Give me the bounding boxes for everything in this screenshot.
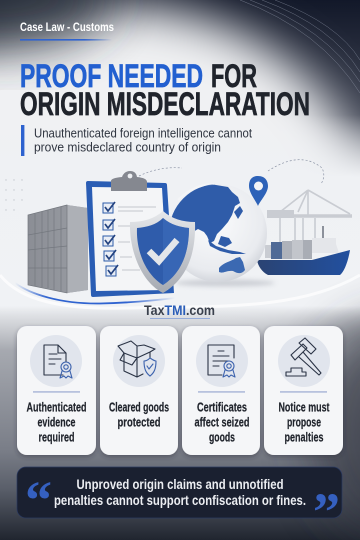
caption: evidence: [38, 416, 76, 430]
title: [20, 58, 310, 122]
caption: affect seized: [194, 416, 250, 430]
caption: required: [38, 430, 74, 444]
caption: [26, 400, 86, 444]
illustration: cargo ship: [257, 226, 350, 275]
subtitle: [21, 125, 252, 156]
checklist: [103, 202, 156, 276]
caption: propose: [287, 416, 321, 430]
eyebrow: Case Law - Customs: Case Law - Customs: [20, 22, 114, 34]
eyebrow: Case Law - Customs: [20, 22, 114, 41]
caption: Cleared goods: [109, 400, 169, 414]
caption: goods: [209, 430, 235, 444]
caption: [109, 400, 169, 430]
panel: certificates: [182, 326, 260, 455]
title: PROOF NEEDED: [20, 58, 203, 94]
callout banner: [17, 467, 342, 540]
caption: penalties: [284, 430, 324, 444]
brand: TaxTMI.com: TaxTMI.com: [144, 303, 215, 318]
illustration: location pin: [249, 176, 268, 206]
caption: protected: [118, 416, 160, 430]
caption: Notice must: [278, 400, 330, 414]
caption: Authenticated: [26, 400, 86, 414]
caption: [278, 400, 330, 444]
illustration: shipping container: [28, 205, 88, 293]
panel: cleared goods: [100, 326, 178, 455]
illustration: shield with check: [130, 211, 195, 293]
subtitle: prove misdeclared country of origin: [34, 140, 221, 154]
title: FOR: [211, 58, 257, 94]
panel: notice: [264, 326, 343, 455]
icon: opening quote: “: [25, 470, 52, 530]
route lines: [139, 160, 324, 184]
callout banner: Unproved origin claims and unnotified: [76, 477, 284, 492]
callout banner: penalties cannot support confiscation or fines.: [54, 493, 306, 508]
icon: gavel: [286, 338, 321, 376]
subtitle: Unauthenticated foreign intelligence cannot: [34, 126, 252, 140]
panel: authenticated evidence: [17, 326, 96, 455]
icon: open box with shield: [118, 341, 156, 377]
illustration: blue swoosh: [15, 283, 175, 304]
illustration: crane: [267, 190, 352, 245]
icon: certificate with seal: [208, 345, 235, 377]
icon: document with seal: [44, 345, 72, 378]
illustration: clipboard with checklist: [86, 171, 174, 297]
caption: [194, 400, 250, 444]
caption: Certificates: [197, 400, 247, 414]
illustration: globe: [168, 184, 275, 286]
clipboard clip: [111, 171, 147, 191]
